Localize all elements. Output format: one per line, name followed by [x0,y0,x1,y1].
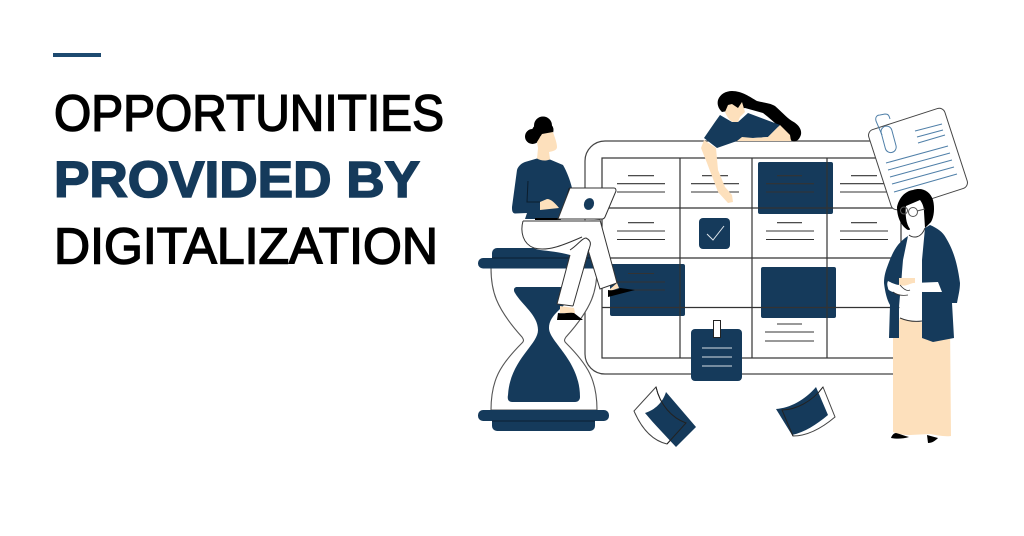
shirt [899,228,928,322]
flying paper right [776,387,835,436]
cardigan [884,225,960,342]
man hand [540,199,559,210]
woman hair [718,91,801,141]
man front leg [522,220,600,306]
calendar board [585,141,918,374]
pinned note [691,320,742,381]
title: PROVIDED BY [54,151,420,208]
title [54,84,444,274]
glasses [900,207,925,216]
check icon tile [699,218,730,249]
person: woman leaning over board [701,91,801,203]
man torso [512,158,572,219]
person: standing woman [884,189,960,443]
man face [537,132,557,162]
title: DIGITALIZATION [54,218,438,274]
standing woman face [906,200,925,237]
woman torso [704,113,780,148]
standing woman hair [897,189,934,230]
title: OPPORTUNITIES [54,84,444,142]
hands [899,278,915,288]
man shoes [557,283,635,320]
clipped document [867,107,969,211]
skirt [893,318,951,436]
accent bar [53,53,101,57]
shoes [891,433,909,439]
hourglass [478,248,609,431]
woman pointing arm [701,140,733,203]
flying paper left [634,387,696,447]
woman face [725,102,745,122]
laptop [535,188,616,219]
woman resting arm [737,125,791,141]
man back leg [575,220,617,289]
man hair [525,116,554,144]
person: man with laptop [512,116,635,320]
